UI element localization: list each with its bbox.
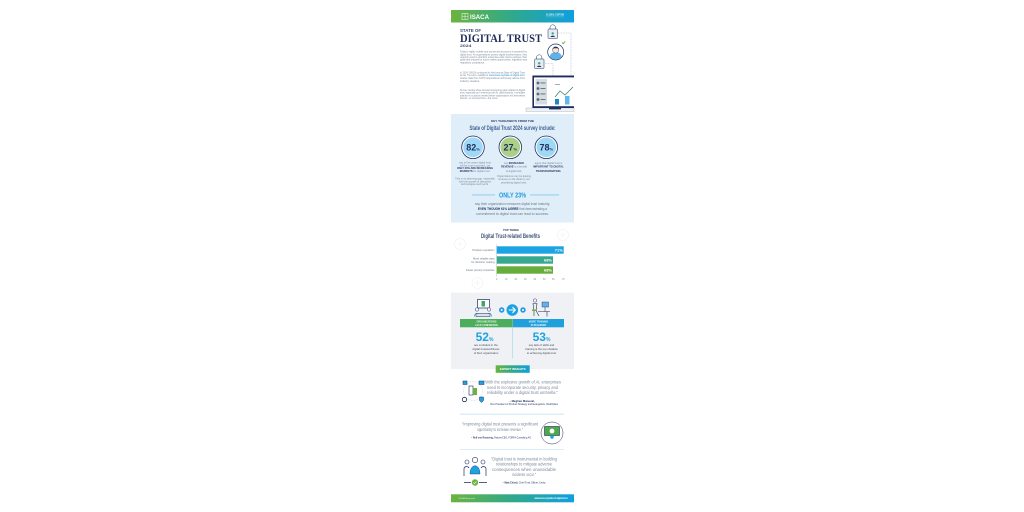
icon: person with check <box>548 41 565 60</box>
chart axis: 20 <box>515 279 518 281</box>
stat: 27%: 27% <box>504 142 518 152</box>
stat: 53%: say lack of skills and <box>529 343 555 347</box>
panel heading: KEY TAKEAWAYS FROM THE <box>491 119 534 123</box>
hero illustration <box>526 25 574 111</box>
stat: 27%: Organizations may be leaving <box>497 174 532 178</box>
intro text: In 2024, ISACA conducted its third annual State of Digital Trust <box>460 70 525 74</box>
ISACA wordmark: ISACA <box>470 14 489 21</box>
stat: 82%: This is an alarming gap, especially <box>455 176 496 180</box>
stat: 27% <box>497 136 532 184</box>
icon: laptop with charts <box>526 76 574 111</box>
intro text: Today's highly mobile and connected economy is powered by <box>460 50 528 54</box>
stat: 27%: of digital trust. <box>506 169 522 173</box>
icon: money <box>541 422 563 444</box>
bar: positive reputation: 71% <box>555 248 563 253</box>
chart axis: 70 <box>562 279 565 281</box>
intro text: attention is crucial as needed before organizations find themselves <box>460 93 526 97</box>
quote: Matt Chiodi: – Matt Chiodi, Chief Trust Officer, Cerby <box>502 480 546 484</box>
panel heading: State of Digital Trust 2024 survey include: <box>470 125 556 132</box>
icon: people with check <box>464 457 487 486</box>
footer band: www.isaca.org/state-of-digital-trust <box>534 497 568 500</box>
stat: 82%: say in five years digital trust <box>459 160 491 164</box>
callout: only 23%: EVEN THOUGH 61% AGREE that demonstrating a <box>478 207 547 211</box>
quote: Rolf von Roessing <box>462 422 563 444</box>
intro text <box>460 50 528 100</box>
bar: fewer privacy breaches: 68% <box>544 268 552 273</box>
stat: 78%: 78% <box>540 142 554 152</box>
badge: expert insights <box>496 365 530 373</box>
banner: organizations lack confidence: LACK CONFIDENCE <box>475 324 498 327</box>
stat: 82%: 82% <box>466 142 480 152</box>
banner: organizations lack confidence <box>460 319 513 327</box>
stat: 53%: 53% <box>533 330 551 344</box>
stat: 52%: 52% <box>476 330 494 344</box>
stat: 27%: say INCREASED <box>504 161 524 165</box>
quote: Meghan Maneval: need to incorporate security, privacy and <box>487 385 558 390</box>
quote: Meghan Maneval: – Meghan Maneval, <box>509 399 535 403</box>
title: STATE OF <box>460 28 481 33</box>
intro text: urgently need to prioritize enterprise-wide trust to achieve their <box>460 55 527 59</box>
intro text: digital trust. As organizations pursue digital transformation, they <box>460 52 528 56</box>
quote: Matt Chiodi: consequences when unavoidable <box>492 467 556 472</box>
title <box>460 28 542 48</box>
banner: organizations lack confidence: ORGANIZATIONS <box>477 321 497 324</box>
intro text: Survey results show several concerning gaps related to digital <box>460 88 525 92</box>
bar: more reliable data <box>471 256 553 264</box>
quote: Meghan Maneval: "With the explosive growth of AI, enterprises <box>484 380 562 384</box>
intro text: behind—or removed from—the curve. <box>460 96 498 100</box>
icon: left padlock <box>534 55 544 68</box>
callout: only 23%: say their organization measures digital trust maturity, <box>475 202 550 206</box>
stat: 52%: of their organization <box>474 351 499 355</box>
chart axis: 30 <box>524 279 527 281</box>
intro text: survey. The report, available at <box>460 73 488 77</box>
stat: 52%: digital trustworthiness <box>473 347 500 351</box>
stat: 27%: prioritizing digital trust. <box>501 180 527 184</box>
chart axis: 50 <box>543 279 546 281</box>
stat: 82%: MARKETS for digital trust. <box>460 169 491 173</box>
banner: more training is required: MORE TRAINING <box>529 321 548 324</box>
panel heading <box>470 119 556 132</box>
chart heading: Digital Trust-related Benefits <box>481 234 540 240</box>
intro text: industry leaders. <box>460 79 480 83</box>
header band <box>451 10 574 22</box>
footer band: © 2024 ISACA. All rights reserved. <box>458 497 475 500</box>
stat: 27%: REVENUE is a benefit <box>501 164 527 168</box>
quote: Matt Chiodi: "Digital trust is instrumental in building <box>491 456 557 461</box>
icon: person at desk <box>532 299 550 316</box>
chart heading <box>481 228 540 240</box>
panel: confidence and training <box>451 293 574 369</box>
panel: key takeaways <box>451 114 574 222</box>
bar: fewer privacy breaches <box>466 266 553 274</box>
stat: 52%: are confident in the <box>474 343 498 347</box>
bar: positive reputation <box>472 246 564 254</box>
quote: Matt Chiodi <box>464 456 557 486</box>
title: 2024 <box>460 44 473 48</box>
stat: 82%: with the growth of disruptive <box>459 179 492 183</box>
quote: Rolf von Roessing: opportunity to increase revenue." <box>477 427 523 432</box>
intro text: goals and prepare for future market opportunities, legislation and <box>460 58 527 62</box>
bar: more reliable data: for decision making <box>471 260 495 264</box>
stat: 78%: IMPORTANT TO DIGITAL <box>533 164 564 168</box>
banner: more training is required: IS REQUIRED <box>531 324 547 327</box>
stat: 82%: technologies such as AI. <box>461 182 489 186</box>
chart axis: 0 <box>496 279 498 281</box>
quote: Rolf von Roessing: "Improving digital trust presents a significant <box>462 422 539 427</box>
bar: more reliable data: 68% <box>544 258 552 263</box>
icon: team at table <box>474 300 492 316</box>
quote: Matt Chiodi: relationships to mitigate adverse <box>496 462 552 467</box>
chart heading: TOP THREE <box>503 228 519 232</box>
chart axis: 60 <box>552 279 555 281</box>
decorative circles with plus <box>454 230 568 288</box>
chart axis: 40 <box>534 279 537 281</box>
quote: Meghan Maneval: reliability under a digital trust umbrella." <box>487 390 558 395</box>
quote: Matt Chiodi: incidents occur." <box>512 472 536 477</box>
stat: 52% <box>473 330 500 355</box>
intro text: trust, especially as it intersects with AI, data incidents. Immediate <box>460 91 525 95</box>
bar: positive reputation: Positive reputation <box>472 248 495 252</box>
quote: Rolf von Roessing: – Rolf von Roessing, Partner/CEO, FORFA Consulting AG <box>471 436 531 440</box>
stat: 53%: to achieving digital trust <box>527 351 556 355</box>
footer band <box>451 494 574 502</box>
callout: only 23%: ONLY 23% <box>499 192 527 199</box>
icon: security building <box>462 381 484 402</box>
quote: Meghan Maneval <box>462 380 562 406</box>
intro text: www.isaca.org/state-of-digital-trust, <box>489 73 525 77</box>
stat: 53% <box>525 330 558 355</box>
bar: fewer privacy breaches: Fewer privacy breaches <box>466 268 495 272</box>
icon: top padlock <box>548 25 558 38</box>
intro text: shares data from 5,870 respondents and timely advice from <box>460 76 525 80</box>
stat: 82%: will be more important, yet <box>460 163 490 167</box>
chart axis: 10 <box>505 279 508 281</box>
stat: 78%: TRANSFORMATION. <box>536 169 561 173</box>
stat: 27%: revenue on the table by not <box>498 177 530 181</box>
stat: 78%: agree that digital trust is <box>535 161 563 165</box>
icon: ISACA logo <box>462 14 468 20</box>
quote: Meghan Maneval: Vice President of Product Strategy and Evangelism, RiskOptics <box>490 403 559 406</box>
intro text: regulatory compliance. <box>460 60 485 64</box>
banner: more training is required <box>513 319 564 327</box>
badge: expert insights: EXPERT INSIGHTS <box>500 367 526 371</box>
stat: 82% <box>455 136 496 186</box>
callout: only 23%: commitment to digital trust can lead to success. <box>476 212 549 216</box>
stat: 78% <box>533 136 564 173</box>
title: DIGITAL TRUST <box>460 31 542 45</box>
stat: 82%: ONLY 30% ARE INCREASING <box>457 166 493 170</box>
bar chart: digital trust benefits <box>466 228 565 281</box>
bar: more reliable data: More reliable data <box>473 256 495 260</box>
callout: only 23% <box>472 192 559 216</box>
chart axis <box>496 279 565 281</box>
stat: 53%: training is the top obstacle <box>525 347 558 351</box>
arrow: left to right <box>499 304 526 316</box>
edition label: GLOBAL EDITION <box>546 13 564 16</box>
